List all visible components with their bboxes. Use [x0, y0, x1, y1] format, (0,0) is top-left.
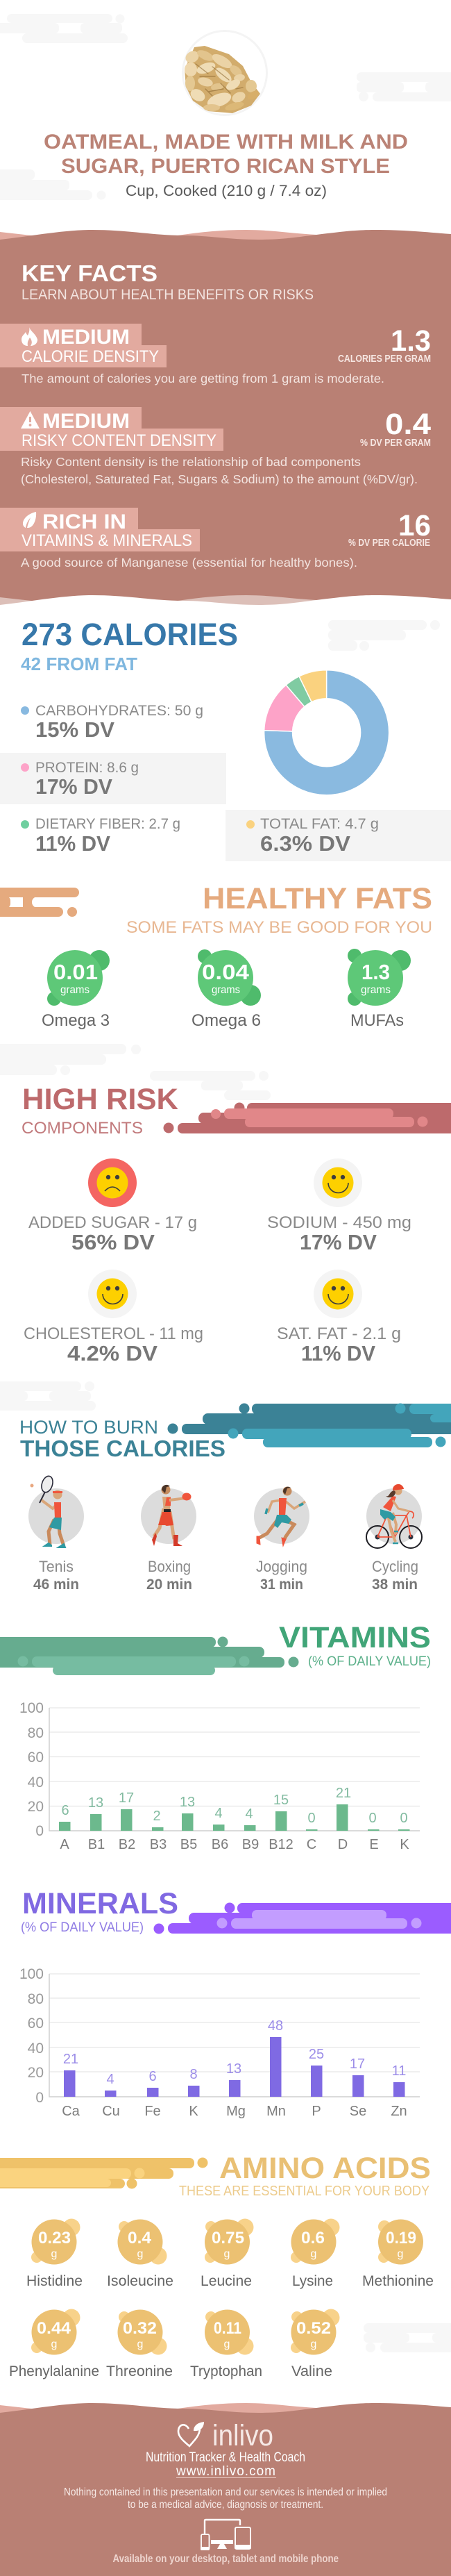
amino: threonine: [106, 2310, 173, 2379]
minerals subheading: (% OF DAILY VALUE): [21, 1920, 144, 1935]
bar chart: vitamins: B1: [88, 1837, 105, 1852]
badge: omega 6: [192, 949, 261, 1030]
amino acids heading: AMINO ACIDS: [219, 2152, 431, 2185]
bar chart: minerals: 21: [63, 2052, 78, 2067]
amino: isoleucine: [107, 2220, 173, 2289]
decoration: healthy fats bars: [0, 888, 79, 917]
title: OATMEAL, MADE WITH MILK AND: [44, 131, 408, 153]
disclaimer: Nothing contained in this presentation and our services is intended or implied: [64, 2486, 387, 2498]
badge: omega 6: Omega 6: [192, 1011, 261, 1030]
icon: leaf: [23, 512, 36, 528]
fact: calorie density: CALORIES PER GRAM: [338, 354, 431, 365]
legend: carbohydrates: 15% DV: [35, 717, 114, 742]
logo: inlivo: [178, 2419, 273, 2452]
amino: leucine: [201, 2218, 254, 2289]
bar chart: vitamins: 21: [336, 1786, 351, 1801]
amino: threonine: 0.32: [123, 2319, 157, 2338]
bar chart: minerals: 25: [309, 2047, 324, 2062]
risk: added sugar: [28, 1158, 197, 1254]
key facts subheading: LEARN ABOUT HEALTH BENEFITS OR RISKS: [22, 287, 314, 303]
bar chart: vitamins: 0: [35, 1823, 44, 1839]
badge: MUFAs: 1.3: [361, 960, 390, 984]
amino: isoleucine: Isoleucine: [107, 2273, 173, 2289]
amino: tryptophan: [190, 2310, 262, 2379]
amino: phenylalanine: [9, 2309, 99, 2379]
label: boxing: [146, 1558, 192, 1593]
amino: methionine: 0.19: [386, 2229, 416, 2247]
availability note: Available on your desktop, tablet and mobile phone: [112, 2553, 339, 2565]
decoration: burn bars: [168, 1403, 451, 1447]
bar chart: vitamins: 0: [368, 1811, 377, 1826]
bar chart: vitamins: 2: [153, 1809, 161, 1824]
risk: added sugar: ADDED SUGAR - 17 g: [28, 1213, 197, 1232]
bar chart: vitamins: 80: [28, 1725, 44, 1741]
amino: lysine: [291, 2218, 340, 2289]
bar chart: minerals: 6: [148, 2069, 157, 2084]
amino: lysine: 0.6: [301, 2229, 325, 2247]
legend: dietary fiber: DIETARY FIBER: 2.7 g: [35, 816, 180, 832]
legend: protein: 17% DV: [35, 774, 112, 799]
legend: total fat: [226, 810, 451, 861]
activity: tennis: [28, 1474, 84, 1547]
fact: rich in vitamins and minerals: RICH IN: [42, 510, 126, 533]
bar chart: minerals: 60: [28, 2016, 44, 2031]
bar chart: vitamins: B12: [269, 1837, 293, 1852]
bar chart: minerals: Cu: [102, 2104, 120, 2119]
panel: footer: [0, 2403, 451, 2576]
legend: total fat: 6.3% DV: [260, 831, 350, 856]
bar chart: minerals: [19, 1966, 420, 2119]
amino: phenylalanine: Phenylalanine: [9, 2363, 99, 2379]
fact: risky content density: % DV PER GRAM: [360, 438, 431, 449]
risk: saturated fat: [277, 1270, 401, 1365]
bar chart: minerals: Mn: [266, 2104, 286, 2119]
badge: MUFAs: grams: [361, 984, 391, 996]
bar chart: minerals: 4: [106, 2072, 114, 2087]
risk: saturated fat: 11% DV: [301, 1341, 375, 1365]
bar chart: vitamins: 100: [19, 1700, 44, 1716]
fact: calorie density: 1.3: [391, 324, 431, 358]
bar chart: vitamins: K: [400, 1837, 409, 1852]
icon: devices: [201, 2520, 251, 2550]
bar chart: vitamins: 0: [307, 1811, 316, 1826]
activity: boxing: [141, 1485, 196, 1546]
label: jogging: 31 min: [260, 1577, 303, 1593]
how to burn heading: HOW TO BURN: [19, 1417, 158, 1438]
donut chart: calorie sources: [264, 670, 389, 795]
amino: phenylalanine: 0.44: [37, 2319, 71, 2338]
label: tennis: [33, 1558, 79, 1593]
bar chart: vitamins: 60: [28, 1750, 44, 1765]
bar chart: minerals: 20: [28, 2065, 44, 2081]
calories from fat: 42 FROM FAT: [21, 654, 137, 674]
bar chart: minerals: K: [189, 2104, 198, 2119]
amino: histidine: g: [51, 2248, 57, 2260]
risk: sodium: 17% DV: [300, 1230, 377, 1254]
amino: leucine: 0.75: [212, 2229, 244, 2247]
fact: risky content density: Risky Content density is the relationship of bad components: [21, 455, 361, 469]
amino: threonine: Threonine: [106, 2363, 173, 2379]
how to burn heading: [19, 1417, 226, 1461]
serving size: Cup, Cooked (210 g / 7.4 oz): [126, 182, 327, 199]
risk: saturated fat: SAT. FAT - 2.1 g: [277, 1324, 401, 1343]
risk: cholesterol: CHOLESTEROL - 11 mg: [24, 1324, 203, 1343]
legend: carbohydrates: [21, 703, 203, 742]
bar chart: minerals: 13: [226, 2061, 241, 2077]
bar chart: vitamins: 40: [28, 1775, 44, 1790]
label: jogging: Jogging: [256, 1558, 307, 1575]
bar chart: minerals: 11: [392, 2063, 406, 2079]
decoration: high risk bars: [164, 1103, 451, 1133]
icon: flame: [22, 327, 37, 346]
legend: total fat: TOTAL FAT: 4.7 g: [260, 816, 379, 832]
amino: methionine: Methionine: [362, 2273, 434, 2289]
title: [44, 131, 408, 178]
bar chart: vitamins: C: [307, 1837, 316, 1852]
bar chart: minerals: 8: [189, 2067, 198, 2082]
fact: risky content density: RISKY CONTENT DENSITY: [22, 431, 216, 450]
disclaimer: [64, 2486, 387, 2511]
amino: leucine: g: [224, 2248, 230, 2260]
fact: rich in vitamins and minerals: % DV PER CALORIE: [348, 538, 430, 549]
fact: rich in vitamins and minerals: 16: [398, 509, 431, 542]
bar chart: minerals: 80: [28, 1991, 44, 2007]
amino: methionine: [362, 2220, 434, 2289]
website: www.inlivo.com: [176, 2464, 275, 2479]
badge: omega 3: grams: [60, 984, 90, 996]
decoration: vitamins bars: [0, 1636, 298, 1675]
fact: risky content density: MEDIUM: [42, 410, 130, 433]
header image: oatmeal in a circle: [183, 31, 266, 115]
fact: risky content density: (Cholesterol, Saturated Fat, Sugars & Sodium) to the amount (%DV/gr).: [21, 472, 418, 486]
label: boxing: 20 min: [146, 1577, 192, 1593]
fact: risky content density: [0, 407, 431, 486]
activity: cycling: [366, 1484, 422, 1548]
amino: isoleucine: 0.4: [128, 2229, 152, 2247]
decoration: minerals bars: [154, 1903, 451, 1934]
label: boxing: Boxing: [148, 1558, 191, 1575]
amino: histidine: Histidine: [26, 2273, 83, 2289]
high risk heading: HIGH RISK: [22, 1083, 178, 1116]
amino: tryptophan: Tryptophan: [190, 2363, 262, 2379]
icon: warning: [21, 411, 40, 429]
badge: omega 3: 0.01: [53, 960, 98, 984]
fact: calorie density: [0, 324, 431, 385]
amino: tryptophan: g: [224, 2338, 230, 2350]
amino: leucine: Leucine: [201, 2273, 252, 2289]
disclaimer: to be a medical advice, diagnosis or treatment.: [128, 2499, 323, 2511]
amino: histidine: 0.23: [38, 2229, 71, 2247]
bar chart: vitamins: E: [369, 1837, 379, 1852]
healthy fats heading: HEALTHY FATS: [203, 882, 432, 915]
amino: methionine: g: [398, 2248, 403, 2260]
badge: omega 3: Omega 3: [42, 1011, 110, 1030]
activity: jogging: [254, 1486, 309, 1546]
amino: valine: g: [311, 2338, 316, 2350]
bar chart: vitamins: 13: [88, 1795, 103, 1811]
bar chart: minerals: 40: [28, 2041, 44, 2056]
minerals heading: MINERALS: [22, 1887, 178, 1920]
high risk subheading: COMPONENTS: [22, 1119, 143, 1138]
fact: calorie density: MEDIUM: [42, 326, 130, 349]
amino: histidine: [26, 2218, 83, 2289]
bar chart: minerals: Ca: [62, 2104, 80, 2119]
vitamins subheading: (% OF DAILY VALUE): [308, 1654, 431, 1669]
badge: omega 6: grams: [212, 984, 240, 996]
label: tennis: Tenis: [39, 1558, 74, 1575]
title: SUGAR, PUERTO RICAN STYLE: [61, 155, 390, 178]
risk: sodium: [267, 1158, 411, 1254]
bar chart: vitamins: 15: [273, 1793, 289, 1808]
bar chart: minerals: 48: [268, 2018, 283, 2034]
bar chart: vitamins: 0: [400, 1811, 408, 1826]
label: tennis: 46 min: [33, 1577, 79, 1593]
bar chart: vitamins: 6: [61, 1803, 69, 1818]
risk: sodium: SODIUM - 450 mg: [267, 1213, 411, 1232]
calories heading: 273 CALORIES: [22, 617, 238, 652]
fact: rich in vitamins and minerals: [0, 508, 431, 570]
badge: omega 3: [42, 950, 110, 1030]
logo: inlivo: inlivo: [212, 2419, 273, 2452]
bar chart: vitamins: D: [338, 1837, 348, 1852]
label: cycling: 38 min: [372, 1577, 418, 1593]
key facts heading: KEY FACTS: [22, 260, 158, 286]
bar chart: minerals: Fe: [144, 2104, 161, 2119]
amino acids subheading: THESE ARE ESSENTIAL FOR YOUR BODY: [179, 2184, 429, 2199]
fact: rich in vitamins and minerals: VITAMINS & MINERALS: [22, 531, 192, 550]
vitamins heading: VITAMINS: [279, 1621, 431, 1654]
bar chart: vitamins: 4: [214, 1806, 223, 1821]
bar chart: minerals: Zn: [391, 2104, 407, 2119]
bar chart: minerals: 17: [350, 2056, 365, 2072]
fact: risky content density: 0.4: [385, 408, 431, 441]
badge: MUFAs: [348, 949, 411, 1030]
bar chart: vitamins: [19, 1700, 420, 1852]
bar chart: vitamins: 17: [119, 1790, 134, 1806]
bar chart: vitamins: 20: [28, 1799, 44, 1815]
bar chart: vitamins: 4: [245, 1806, 253, 1822]
bar chart: vitamins: B9: [242, 1837, 259, 1852]
panel: key facts: [0, 230, 451, 615]
label: jogging: [256, 1558, 307, 1593]
bar chart: vitamins: B2: [119, 1837, 135, 1852]
amino: lysine: Lysine: [292, 2273, 333, 2289]
label: cycling: Cycling: [372, 1558, 418, 1575]
bar chart: minerals: Se: [350, 2104, 366, 2119]
risk: cholesterol: [24, 1270, 203, 1365]
fact: calorie density: The amount of calories you are getting from 1 gram is moderate.: [22, 372, 384, 385]
legend: dietary fiber: [21, 816, 180, 856]
amino: valine: [291, 2309, 340, 2379]
amino: isoleucine: g: [137, 2248, 143, 2260]
legend: protein: [0, 753, 226, 804]
legend: protein: PROTEIN: 8.6 g: [35, 760, 139, 776]
bar chart: minerals: P: [312, 2104, 321, 2119]
how to burn heading: THOSE CALORIES: [20, 1436, 226, 1461]
fact: calorie density: CALORIE DENSITY: [22, 347, 159, 366]
legend: carbohydrates: CARBOHYDRATES: 50 g: [35, 703, 203, 719]
amino: threonine: g: [137, 2338, 143, 2350]
bar chart: vitamins: B6: [212, 1837, 228, 1852]
badge: omega 6: 0.04: [202, 960, 250, 984]
bar chart: minerals: 0: [35, 2090, 44, 2106]
amino: valine: 0.52: [296, 2319, 331, 2338]
bar chart: minerals: 100: [19, 1966, 44, 1982]
badge: MUFAs: MUFAs: [350, 1011, 404, 1030]
amino: valine: Valine: [291, 2363, 332, 2379]
bar chart: vitamins: B3: [150, 1837, 167, 1852]
bar chart: vitamins: B5: [180, 1837, 197, 1852]
label: cycling: [372, 1558, 418, 1593]
bar chart: vitamins: 13: [180, 1795, 195, 1810]
decoration: amino acids bars: [0, 2157, 208, 2189]
bar chart: minerals: Mg: [226, 2104, 246, 2119]
bar chart: vitamins: A: [60, 1837, 69, 1852]
fact: rich in vitamins and minerals: A good source of Manganese (essential for healthy bones).: [21, 556, 357, 570]
healthy fats subheading: SOME FATS MAY BE GOOD FOR YOU: [126, 918, 432, 937]
risk: added sugar: 56% DV: [71, 1230, 155, 1254]
risk: cholesterol: 4.2% DV: [67, 1341, 158, 1365]
amino: tryptophan: 0.11: [214, 2319, 241, 2338]
tagline: Nutrition Tracker & Health Coach: [146, 2450, 305, 2465]
legend: dietary fiber: 11% DV: [35, 831, 110, 856]
amino: phenylalanine: g: [51, 2338, 57, 2350]
amino: lysine: g: [311, 2248, 316, 2260]
